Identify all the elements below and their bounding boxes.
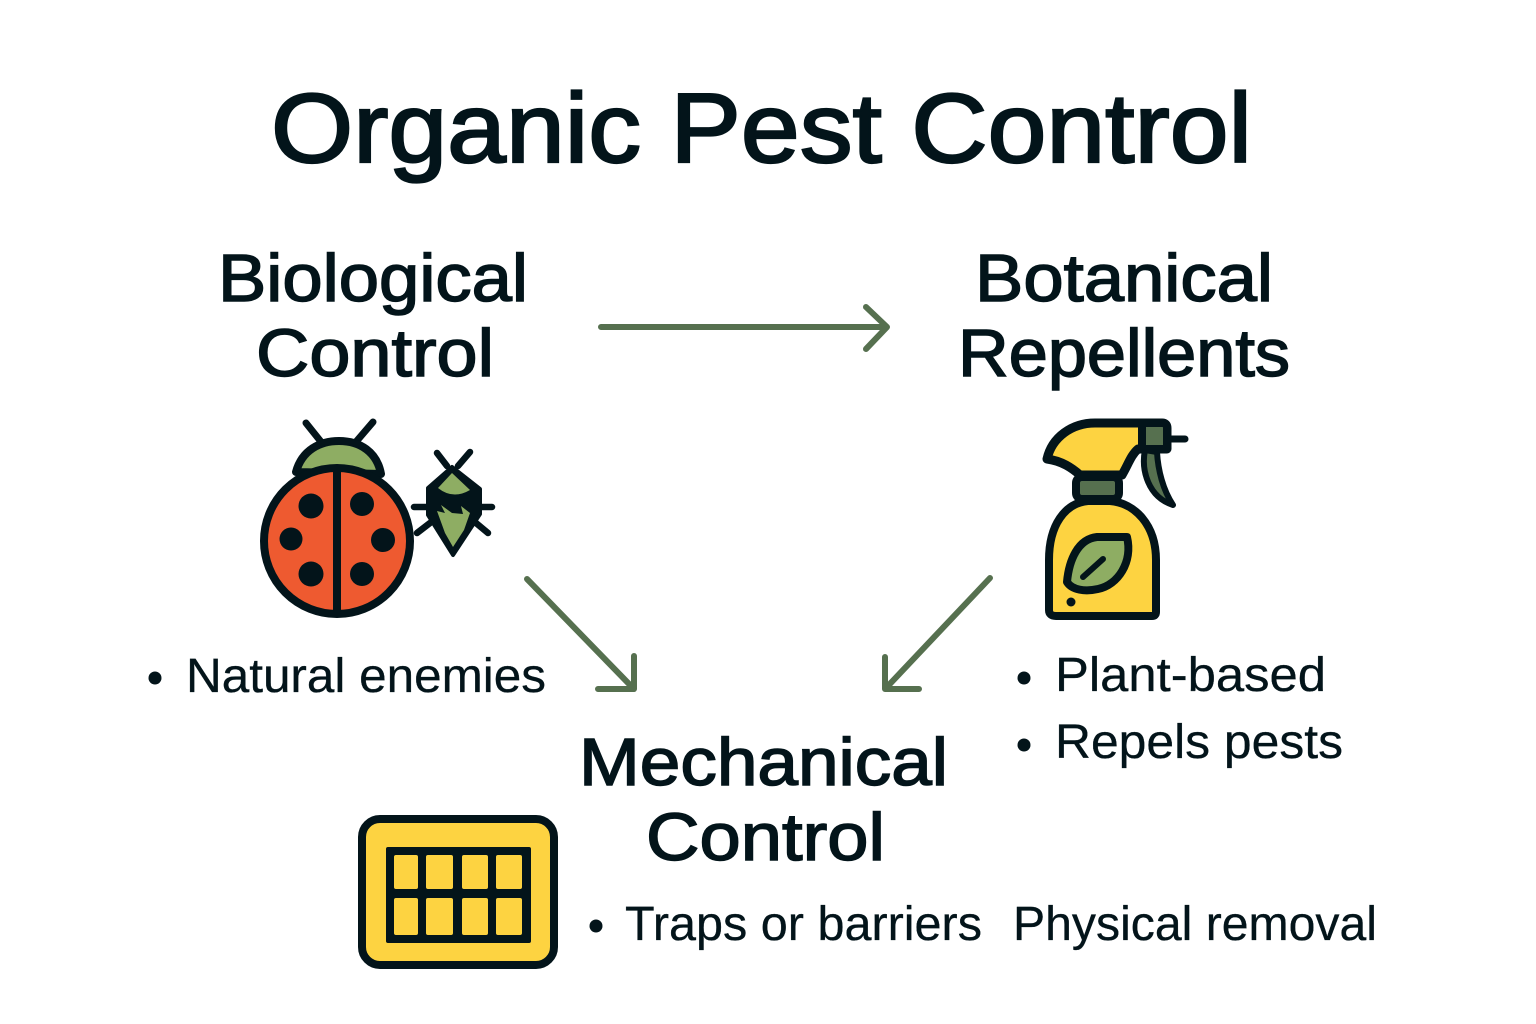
arrow: biological to mechanical bbox=[527, 579, 634, 689]
text: repels pests: Repels pests bbox=[1055, 716, 1343, 769]
text: physical removal: Physical removal bbox=[1013, 898, 1377, 951]
icon: ladybug bbox=[264, 422, 410, 614]
title: Organic Pest Control bbox=[271, 73, 1252, 183]
heading: botanical repellents: Repellents bbox=[958, 316, 1290, 391]
heading: mechanical control: Control bbox=[646, 800, 885, 875]
arrow: biological to botanical bbox=[601, 307, 887, 349]
heading: botanical repellents bbox=[958, 241, 1290, 391]
heading: botanical repellents: Botanical bbox=[975, 241, 1273, 316]
icon: spray bottle bbox=[1047, 423, 1185, 616]
text: plant-based: Plant-based bbox=[1055, 649, 1326, 702]
heading: mechanical control: Mechanical bbox=[579, 725, 948, 800]
heading: mechanical control bbox=[579, 725, 948, 875]
heading: biological control: Biological bbox=[218, 241, 528, 316]
heading: biological control bbox=[218, 241, 528, 391]
text: traps or barriers: Traps or barriers bbox=[625, 898, 982, 951]
icon: aphid pest bbox=[414, 452, 492, 555]
icon: trap grid bbox=[362, 819, 554, 965]
heading: biological control: Control bbox=[256, 316, 494, 391]
arrow: botanical to mechanical bbox=[885, 578, 990, 689]
text: natural enemies: Natural enemies bbox=[186, 650, 546, 703]
